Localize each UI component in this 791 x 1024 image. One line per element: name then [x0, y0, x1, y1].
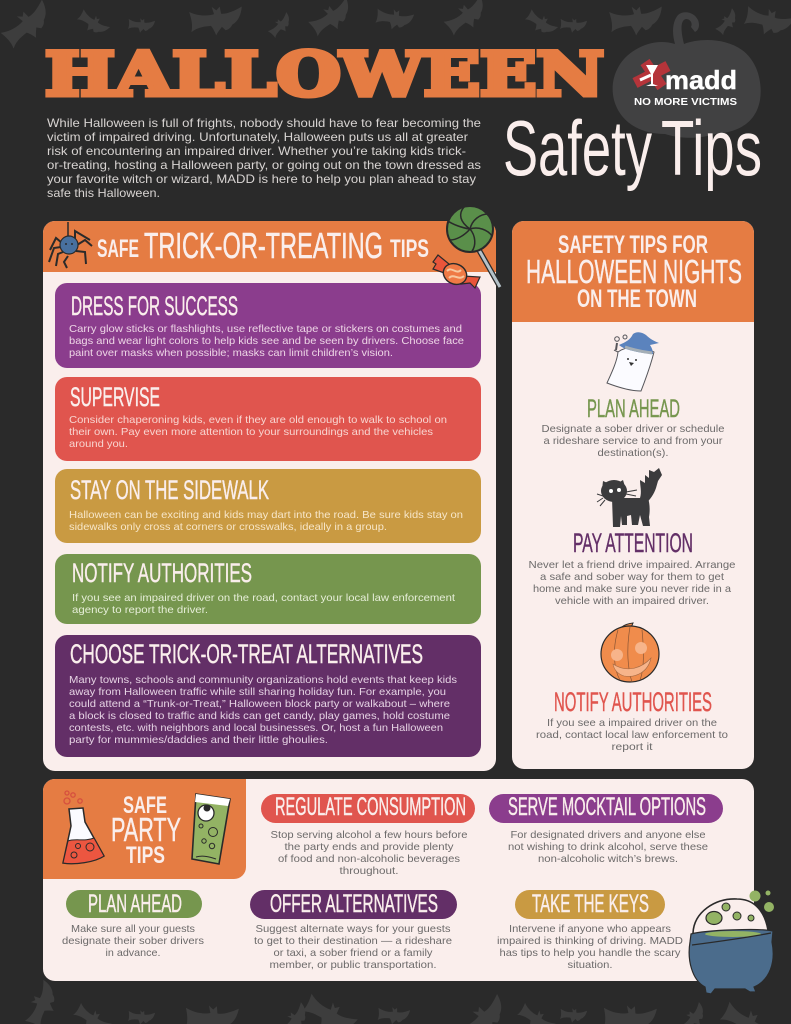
tip: offer alternatives: to get to their destination — a rideshare [254, 935, 452, 947]
card: notify authorities: NOTIFY AUTHORITIES [72, 558, 252, 588]
intro paragraph: or-treating, hosting a Halloween party, or going out on the town dressed as [47, 158, 481, 172]
tip: regulate consumption: of food and non-alcoholic beverages [278, 853, 460, 865]
tip: offer alternatives: member, or public transportation. [270, 959, 436, 971]
icon: spider [49, 222, 92, 268]
icon: wrapped candy [433, 255, 480, 288]
heading: safe party tips: SAFE [123, 792, 167, 819]
heading: safe party tips: TIPS [126, 842, 165, 869]
card: dress for success: DRESS FOR SUCCESS [71, 291, 238, 321]
card: supervise [55, 377, 481, 461]
icon: bubbling cauldron [689, 890, 774, 994]
card: notify authorities: agency to report the driver. [72, 604, 208, 616]
card: dress for success: bags and wear light colors to help kids see and be seen by drivers. Choose face [69, 335, 464, 347]
tip: regulate consumption: throughout. [340, 865, 398, 877]
heading: safe party tips: PARTY [111, 811, 181, 848]
panel: safe party tips [43, 779, 754, 981]
heading: safe trick-or-treating tips: TRICK-OR-TREATING [144, 225, 383, 266]
panel: safety tips for Halloween nights on the town [512, 221, 754, 769]
icon: lollipop [447, 206, 500, 287]
card: choose trick-or-treat alternatives [55, 635, 481, 757]
card: supervise: their own. Pay even more attention to your surroundings and the vehicles [69, 426, 433, 438]
tip: plan ahead [542, 395, 725, 459]
tip: regulate consumption: REGULATE CONSUMPTION [275, 793, 466, 821]
heading: safe party tips [111, 792, 181, 869]
tip: plan ahead [62, 890, 204, 959]
tip: plan ahead: PLAN AHEAD [88, 890, 182, 918]
tip: take the keys: has tips to help you handle the scary [500, 947, 681, 959]
intro paragraph: victim of impaired driving. Unfortunately, Halloween puts us all at greater [47, 130, 468, 144]
heading: Safety Tips: Safety [503, 104, 652, 192]
tip: pay attention: Never let a friend drive impaired. Arrange [528, 559, 736, 571]
tip: pay attention: a safe and sober way for them to get [540, 571, 724, 583]
card: supervise: SUPERVISE [70, 382, 160, 412]
card: stay on the sidewalk: sidewalks only cross at corners or crosswalks, ideally in a group. [69, 521, 387, 533]
intro paragraph: risk of encountering an impaired driver. Whether you’re taking kids trick- [47, 144, 466, 158]
card: stay on the sidewalk: Halloween can be exciting and kids may dart into the road. Be sure kids stay on [69, 509, 463, 521]
tip: offer alternatives [250, 890, 457, 971]
tip: notify authorities: If you see a impaired driver on the [547, 717, 717, 729]
heading: nights on the town [526, 231, 742, 313]
tip: take the keys: impaired is thinking of driving. MADD [497, 935, 683, 947]
card: choose trick-or-treat alternatives: Many towns, schools and community organizations hold events that keep kids [69, 674, 457, 686]
tip: pay attention [528, 528, 736, 607]
tip: serve mocktail options [489, 793, 723, 865]
card: supervise: Consider chaperoning kids, even if they are old enough to walk to school on [69, 414, 447, 426]
tip: offer alternatives: Suggest alternate ways for your guests [256, 923, 450, 935]
tip: serve mocktail options: For designated drivers and anyone else [510, 829, 706, 841]
heading: safe trick-or-treating tips [97, 225, 429, 266]
intro paragraph: While Halloween is full of frights, nobody should have to fear becoming the [47, 116, 481, 130]
background bats: bottom row [18, 980, 776, 1024]
intro paragraph: your favorite witch or wizard, MADD is here to help you plan ahead to stay [47, 172, 476, 186]
card: choose trick-or-treat alternatives: CHOOSE TRICK-OR-TREAT ALTERNATIVES [70, 639, 423, 669]
tip: notify authorities [536, 687, 728, 753]
card: choose trick-or-treat alternatives: contests, etc. with neighbors and local businesses. Or, host a fun Halloween [69, 722, 443, 734]
tip: notify authorities: road, contact local law enforcement to [536, 729, 728, 741]
tip: take the keys [497, 890, 683, 971]
tip: take the keys: TAKE THE KEYS [532, 890, 649, 918]
heading: safe trick-or-treating tips: SAFE [97, 235, 139, 263]
card: choose trick-or-treat alternatives: a block is closed to traffic and kids can get candy, play games, hold costume [69, 710, 450, 722]
card: dress for success: paint over masks when possible; masks can limit children’s vision. [69, 347, 393, 359]
intro paragraph [47, 116, 481, 200]
card: supervise: around you. [69, 438, 128, 450]
title: Halloween: HALLOWEEN [45, 40, 604, 110]
logo pumpkin with MADD logo: madd [665, 65, 737, 95]
logo pumpkin with MADD logo: NO MORE VICTIMS [634, 96, 737, 108]
intro paragraph: safe this Halloween. [47, 186, 160, 200]
tip: plan ahead: Designate a sober driver or schedule [542, 423, 725, 435]
icon: jack-o-lantern [601, 623, 659, 682]
tip: plan ahead: in advance. [106, 947, 160, 959]
card: stay on the sidewalk [55, 469, 481, 543]
tip: plan ahead: destination(s). [598, 447, 668, 459]
tip: plan ahead: a rideshare service to and from your [544, 435, 723, 447]
card: choose trick-or-treat alternatives: party for mummies/daddies and their little ghoulies. [69, 734, 328, 746]
card: dress for success [55, 283, 481, 368]
tip: offer alternatives: OFFER ALTERNATIVES [270, 890, 438, 918]
icon: ghost with witch hat [607, 332, 659, 391]
card: notify authorities: If you see an impaired driver on the road, contact your local law enforcement [72, 592, 455, 604]
tip: pay attention: home and make sure you never ride in a [533, 583, 731, 595]
tip: plan ahead: PLAN AHEAD [587, 395, 680, 423]
tip: regulate consumption: Stop serving alcohol a few hours before [270, 829, 468, 841]
tip: pay attention: PAY ATTENTION [573, 528, 693, 558]
tip: plan ahead: designate their sober drivers [62, 935, 204, 947]
icon: black cat [597, 468, 662, 527]
icon: eyeball drink [192, 794, 230, 864]
tip: serve mocktail options: not wishing to drink alcohol, serve these [508, 841, 708, 853]
tip: regulate consumption: the party ends and provide plenty [284, 841, 454, 853]
card: choose trick-or-treat alternatives: away from Halloween traffic while still sharing holiday fun. For example, you [69, 686, 446, 698]
background bats: top row [0, 0, 791, 51]
tip: pay attention: vehicle with an impaired driver. [555, 595, 709, 607]
card: stay on the sidewalk: STAY ON THE SIDEWALK [70, 475, 269, 505]
card: choose trick-or-treat alternatives: could attend a “Trunk-or-Treat,” Halloween block party or walkabout – where [69, 698, 450, 710]
tip: serve mocktail options: non-alcoholic witch’s brews. [538, 853, 678, 865]
card: dress for success: Carry glow sticks or flashlights, use reflective tape or stickers on costumes and [69, 323, 462, 335]
logo pumpkin with MADD logo [613, 12, 761, 138]
tip: take the keys: situation. [568, 959, 612, 971]
panel: safe trick-or-treating tips [43, 221, 496, 771]
icon: flask [63, 791, 104, 864]
tip: notify authorities: report it [612, 741, 653, 753]
heading: safe trick-or-treating tips: TIPS [390, 235, 429, 263]
tip: regulate consumption [261, 793, 475, 877]
tip: take the keys: Intervene if anyone who appears [509, 923, 671, 935]
heading: nights on the town: SAFETY TIPS FOR [558, 231, 708, 259]
icon: MADD crossed-out glass [635, 62, 668, 87]
heading: nights on the town: ON THE TOWN [577, 285, 697, 313]
tip: offer alternatives: or taxi, a sober friend or a family [274, 947, 433, 959]
tip: plan ahead: Make sure all your guests [71, 923, 195, 935]
card: notify authorities [55, 554, 481, 624]
